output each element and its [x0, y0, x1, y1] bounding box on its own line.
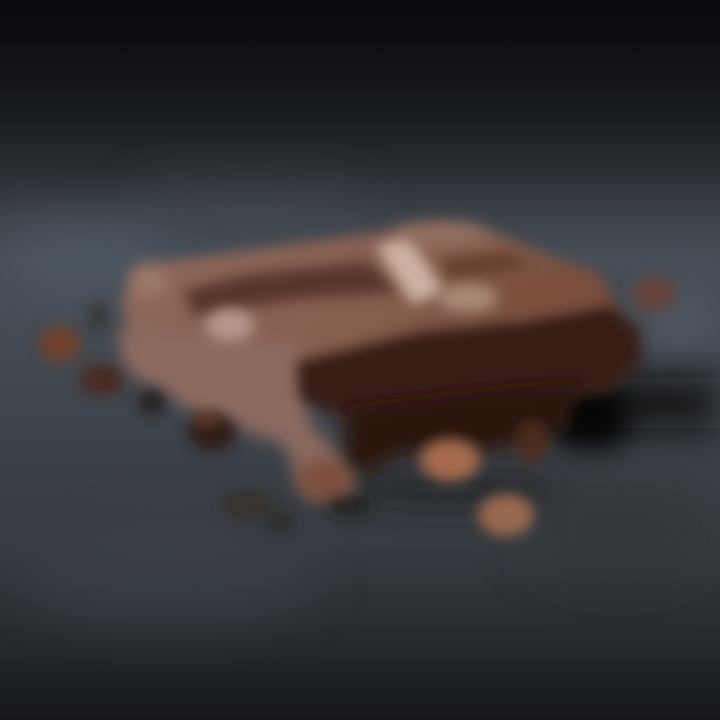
piece: right of centre — [516, 420, 548, 464]
highlight: left bar sheen — [206, 309, 254, 341]
piece: front bright — [478, 494, 534, 536]
shadow under chocolate — [340, 378, 720, 510]
piece: centre left — [188, 413, 236, 451]
chocolate bar and pieces — [39, 222, 676, 536]
piece: left dark upper — [88, 301, 108, 331]
piece: right tip — [632, 277, 676, 311]
highlight: left corner — [132, 268, 168, 296]
bar: groove left — [184, 262, 400, 316]
highlight: right of ridge — [438, 284, 498, 312]
piece: lower dark left — [221, 489, 275, 521]
piece highlight: centre left — [195, 414, 221, 426]
piece: left third — [138, 389, 166, 415]
bar: left lower face — [118, 330, 350, 495]
piece: lower centre shadow — [328, 496, 372, 516]
highlight: cross ridge top — [390, 224, 500, 246]
bar: top surface — [122, 222, 622, 420]
piece: left second — [80, 364, 124, 396]
piece: left far — [39, 326, 81, 362]
piece: centre bright — [420, 439, 480, 481]
highlight: cross ridge — [376, 236, 444, 304]
piece: lower dark small — [265, 512, 295, 532]
bar: dark front face — [296, 306, 642, 420]
bar: darker lower front — [345, 385, 580, 475]
bar: lower tail — [297, 458, 353, 502]
bar: right top band — [490, 270, 610, 315]
surface shading — [5, 185, 718, 630]
bar: groove right — [440, 252, 530, 280]
